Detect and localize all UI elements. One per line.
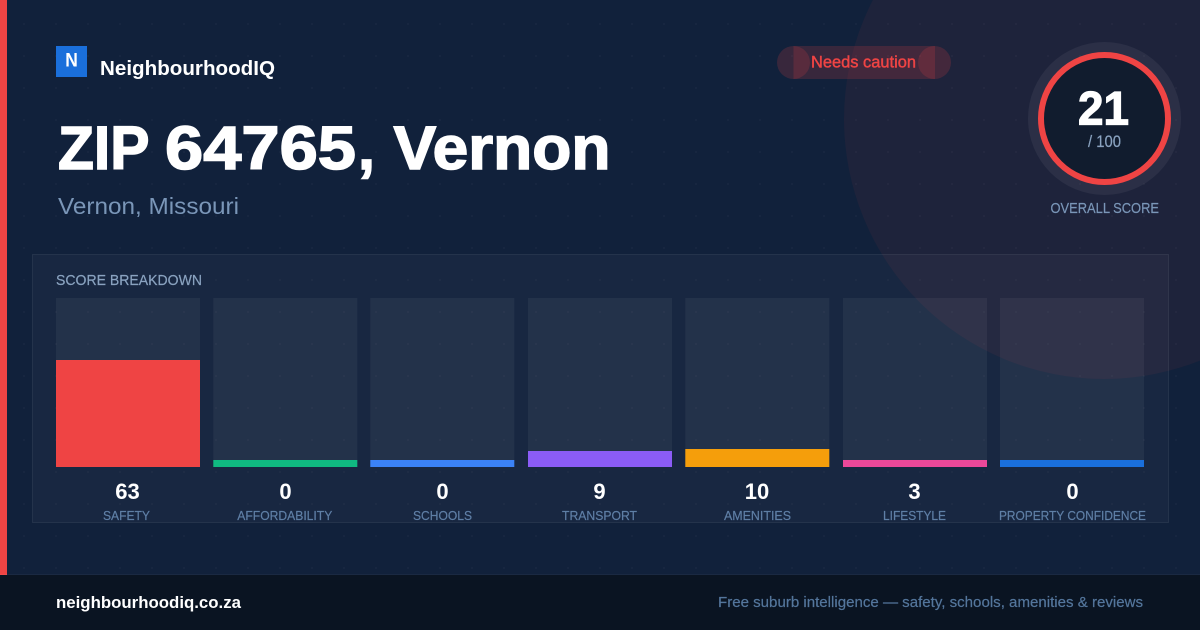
bar: amenities: AMENITIES <box>724 508 791 523</box>
subtitle: Vernon, Missouri <box>58 193 239 219</box>
panel: score breakdown <box>32 254 1168 523</box>
score value: 21 <box>1078 82 1129 134</box>
title: , <box>358 114 375 182</box>
accent stripe <box>0 0 7 575</box>
bar: safety: 63 <box>115 479 140 504</box>
decorative circle: top right glow <box>844 0 1200 379</box>
bar: amenities <box>685 298 829 523</box>
footer <box>0 574 1200 630</box>
bar: lifestyle: 3 <box>908 479 921 504</box>
bar: schools: SCHOOLS <box>413 508 472 523</box>
status pill: Needs caution <box>811 54 916 72</box>
footer url: neighbourhoodiq.co.za <box>56 593 242 612</box>
bar: amenities: 10 <box>745 479 769 504</box>
title: ZIP <box>58 114 150 182</box>
bar: safety: SAFETY <box>103 508 150 523</box>
brand name: NeighbourhoodIQ <box>100 58 275 80</box>
bar: schools <box>370 298 514 523</box>
bar: property confidence <box>999 298 1146 523</box>
title: Vernon <box>394 114 610 182</box>
bar: schools: 0 <box>436 479 449 504</box>
bar: safety <box>56 298 200 523</box>
bar: transport: 9 <box>593 479 606 504</box>
title <box>58 114 610 182</box>
bar: lifestyle: LIFESTYLE <box>883 508 946 523</box>
gauge label: OVERALL SCORE <box>1050 200 1159 217</box>
icon: logo square: N <box>65 51 78 72</box>
bar: affordability: 0 <box>279 479 292 504</box>
bar: lifestyle <box>843 298 987 523</box>
bar: property confidence: 0 <box>1066 479 1079 504</box>
status pill <box>777 46 951 79</box>
bar: affordability <box>213 298 357 523</box>
title: 64765 <box>165 114 356 182</box>
panel heading: SCORE BREAKDOWN <box>56 272 202 289</box>
bar: transport <box>528 298 672 523</box>
brand logo <box>56 46 275 80</box>
bar: transport: TRANSPORT <box>562 508 637 523</box>
footer tagline: Free suburb intelligence — safety, schools, amenities & reviews <box>718 594 1143 611</box>
score maximum: / 100 <box>1088 133 1121 151</box>
bar: property confidence: PROPERTY CONFIDENCE <box>999 508 1146 523</box>
icon: logo square <box>56 46 87 77</box>
bar: affordability: AFFORDABILITY <box>237 508 333 523</box>
score gauge <box>1028 42 1181 195</box>
